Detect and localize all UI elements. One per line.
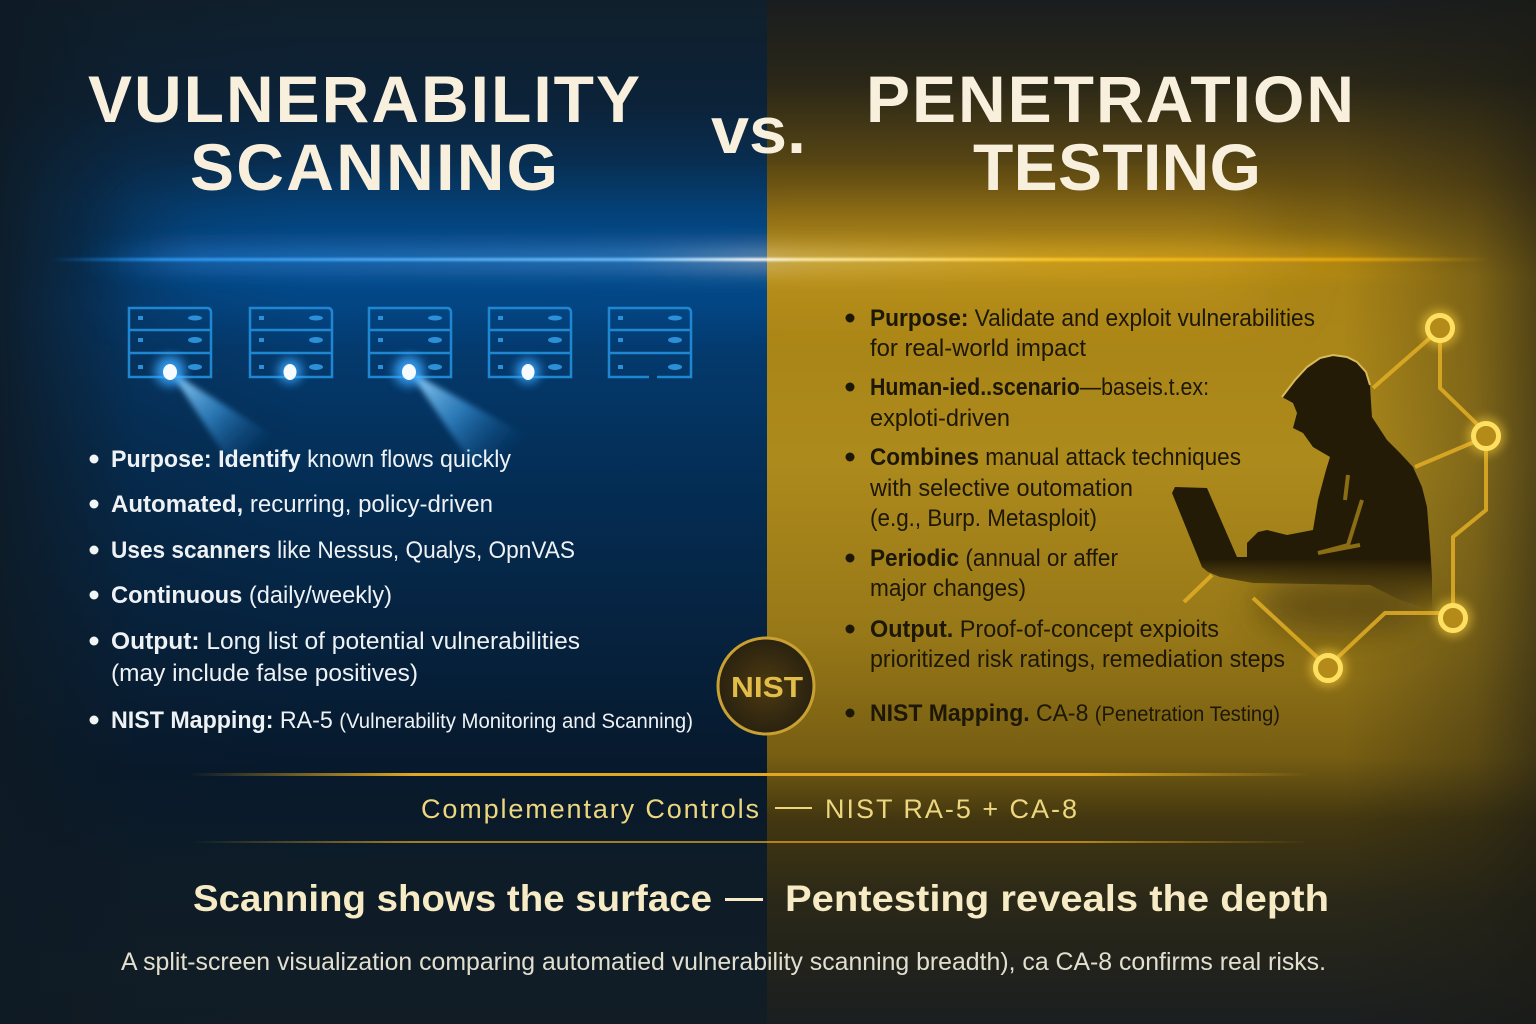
tagline: Scanning shows the surface <box>193 878 712 919</box>
horizontal glow divider <box>50 225 1490 285</box>
text block: scanning bullet list <box>90 446 693 734</box>
title: vulnerability scanning <box>88 62 640 204</box>
text block: pentesting bullet list: Combines manual attack techniques <box>870 444 1241 471</box>
text block: pentesting bullet list: Output. Proof-of-concept expioits <box>870 616 1219 643</box>
text block: pentesting bullet list: NIST Mapping. CA-8 (Penetration Testing) <box>870 700 1280 727</box>
text block: scanning bullet list: Output: Long list of potential vulnerabilities <box>111 628 580 655</box>
title: vulnerability scanning: VULNERABILITY <box>88 62 640 136</box>
text block: pentesting bullet list: for real-world impact <box>870 335 1086 362</box>
text block: pentesting bullet list: with selective outomation <box>869 475 1133 502</box>
text block: pentesting bullet list: exploti-driven <box>870 405 1010 432</box>
text block: pentesting bullet list: Human-ied..scenario—baseis.t.ex: <box>870 374 1209 401</box>
text block: pentesting bullet list: prioritized risk ratings, remediation steps <box>870 646 1285 673</box>
text block: scanning bullet list: (may include false positives) <box>111 660 418 687</box>
text block: scanning bullet list: Continuous (daily/weekly) <box>111 582 392 609</box>
badge: NIST <box>718 638 814 734</box>
panel: left blue background <box>0 0 767 1024</box>
title: penetration testing: TESTING <box>973 130 1261 204</box>
icon: server racks with scanning beams <box>129 308 691 470</box>
caption: A split-screen visualization comparing automatied vulnerability scanning breadth), ca CA-8 confirms real risks. <box>121 948 1326 976</box>
tagline <box>193 878 1329 919</box>
title: penetration testing: PENETRATION <box>866 62 1354 136</box>
text block: pentesting bullet list <box>846 305 1315 727</box>
text block: scanning bullet list: Purpose: Identify known flows quickly <box>111 446 511 473</box>
text block: pentesting bullet list: Periodic (annual or affer <box>870 545 1118 572</box>
haze beneath silhouette <box>1255 573 1425 637</box>
text block: pentesting bullet list: Purpose: Validate and exploit vulnerabilities <box>870 305 1315 332</box>
title: vs.: vs. <box>711 93 806 167</box>
complementary controls band <box>190 773 1310 843</box>
title: penetration testing <box>866 62 1354 204</box>
complementary controls band: NIST RA-5 + CA-8 <box>825 794 1077 824</box>
icon: hacker silhouette with laptop <box>1172 355 1432 610</box>
network lines and nodes <box>1184 315 1499 681</box>
text block: scanning bullet list: Uses scanners like Nessus, Qualys, OpnVAS <box>111 537 575 564</box>
badge: NIST: NIST <box>731 672 803 704</box>
panel: right gold background <box>767 0 1536 1024</box>
text block: scanning bullet list: NIST Mapping: RA-5 (Vulnerability Monitoring and Scanning) <box>111 707 693 734</box>
text block: pentesting bullet list: (e.g., Burp. Metasploit) <box>870 505 1097 532</box>
text block: scanning bullet list: Automated, recurring, policy-driven <box>111 491 493 518</box>
title: vulnerability scanning: SCANNING <box>190 130 558 204</box>
tagline: Pentesting reveals the depth <box>785 878 1329 919</box>
text block: pentesting bullet list: major changes) <box>870 575 1026 602</box>
complementary controls band: Complementary Controls <box>421 794 759 824</box>
